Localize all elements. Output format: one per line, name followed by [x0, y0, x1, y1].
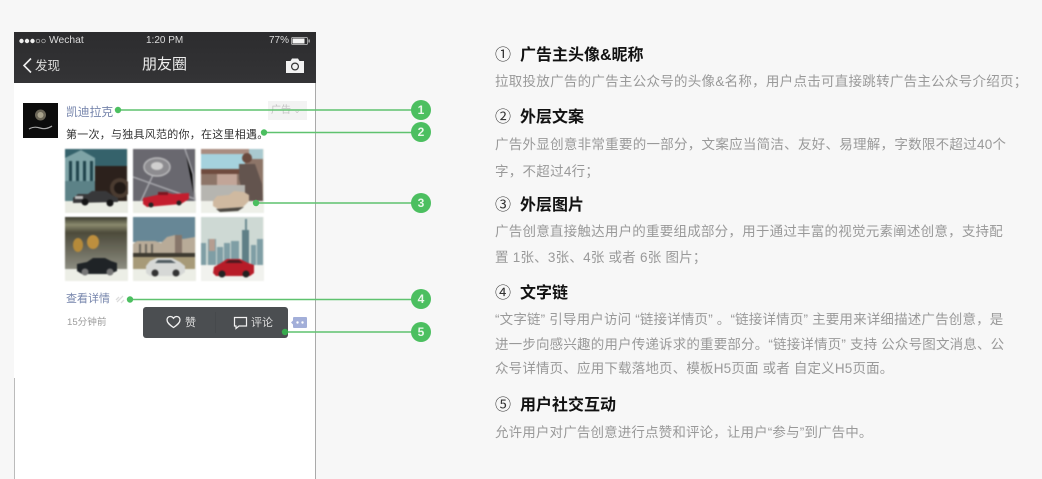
ad copy: 第一次，与独具风范的你，在这里相遇。: [66, 129, 268, 141]
heading 4: ④: [495, 285, 511, 302]
callout badge 5: 5: [418, 325, 424, 339]
image 4: dark car, amber lights: [64, 216, 128, 282]
description 4: 进一步向感兴趣的用户传递诉求的重要部分。“链接详情页” 支持 公众号图文消息、公: [495, 336, 1004, 352]
icon: link: [116, 296, 124, 304]
callout badge 2: 2: [418, 125, 424, 139]
callout badge 3: 3: [418, 196, 424, 210]
page title: 朋友圈: [142, 56, 187, 73]
description 3: [495, 224, 1003, 265]
image 1: vintage black car: [64, 148, 129, 214]
description 4: 众号详情页、应用下载落地页、模板H5页面 或者 自定义H5页面。: [495, 361, 893, 376]
description 2: 字，不超过4行；: [495, 164, 599, 179]
heading 5: ⑤: [495, 397, 511, 414]
heading 3: ③: [495, 197, 511, 214]
popup divider: [215, 312, 216, 333]
heading 3: 外层图片: [520, 197, 584, 214]
back arrow: [23, 58, 32, 74]
icon: comment button: [291, 317, 307, 328]
callout badge 2: [411, 122, 431, 142]
panel: phone mockup: [14, 32, 316, 479]
image grid: [64, 148, 264, 282]
heading 2: [495, 108, 584, 126]
comment label: 评论: [251, 317, 273, 329]
description 4: “文字链” 引导用户访问 “链接详情页” 。“链接详情页” 主要用来详细描述广告创意，是: [495, 312, 1003, 327]
callout badge 4: [411, 289, 431, 309]
signal dots: [19, 38, 46, 44]
callout badge 1: 1: [418, 103, 424, 117]
callout badge 1: [411, 100, 431, 120]
heading 2: 外层文案: [520, 109, 584, 126]
advertiser name: 凯迪拉克: [66, 105, 113, 119]
ad tag: [268, 101, 307, 120]
ad tag: 广告 ⌄: [271, 105, 300, 116]
like label: 赞: [185, 317, 196, 329]
icon: camera: [286, 58, 304, 73]
post time: 15分钟前: [67, 317, 106, 328]
back label: 发现: [35, 59, 60, 73]
clock: 1:20 PM: [146, 35, 183, 46]
image 6: red sedan, skyline: [200, 216, 264, 281]
description 5: 允许用户对广告创意进行点赞和评论，让用户“参与”到广告中。: [495, 425, 873, 440]
social action popup: [143, 307, 288, 338]
heading 1: ①: [495, 47, 511, 64]
callout badge 4: 4: [418, 292, 424, 306]
description 1: 拉取投放广告的广告主公众号的头像&名称，用户点击可直接跳转广告主公众号介绍页；: [495, 74, 1028, 89]
carrier label: Wechat: [49, 35, 84, 46]
phone header bar: [14, 32, 316, 83]
icon: advertiser avatar: [23, 103, 58, 138]
heading 4: 文字链: [520, 285, 568, 302]
battery percent: 77%: [269, 35, 289, 46]
heading 2: ②: [495, 109, 511, 126]
image 2: red convertible: [132, 148, 196, 214]
battery icon: [291, 37, 310, 45]
description 3: 广告创意直接触达用户的重要组成部分，用于通过丰富的视觉元素阐述创意，支持配: [495, 224, 1003, 239]
heading 4: [495, 284, 568, 302]
heading 1: 广告主头像&昵称: [520, 47, 644, 64]
phone right edge and lower left edge: [315, 83, 316, 479]
description 4: [495, 312, 1004, 376]
image 3: beige classic car with man: [200, 148, 264, 214]
icon: comment: [234, 316, 248, 330]
description 2: 广告外显创意非常重要的一部分，文案应当简洁、友好、易理解，字数限不超过40个: [495, 137, 1006, 152]
callout badge 3: [411, 193, 431, 213]
icon: heart: [166, 316, 181, 328]
callout badge 5: [411, 322, 431, 342]
heading 3: [495, 196, 584, 214]
description 3: 置 1张、3张、4张 或者 6张 图片；: [495, 250, 707, 265]
heading 5: 用户社交互动: [520, 397, 616, 414]
image 5: silver SUV, city ruins: [132, 216, 196, 282]
detail link: 查看详情: [66, 293, 110, 305]
description 2: [495, 137, 1006, 179]
